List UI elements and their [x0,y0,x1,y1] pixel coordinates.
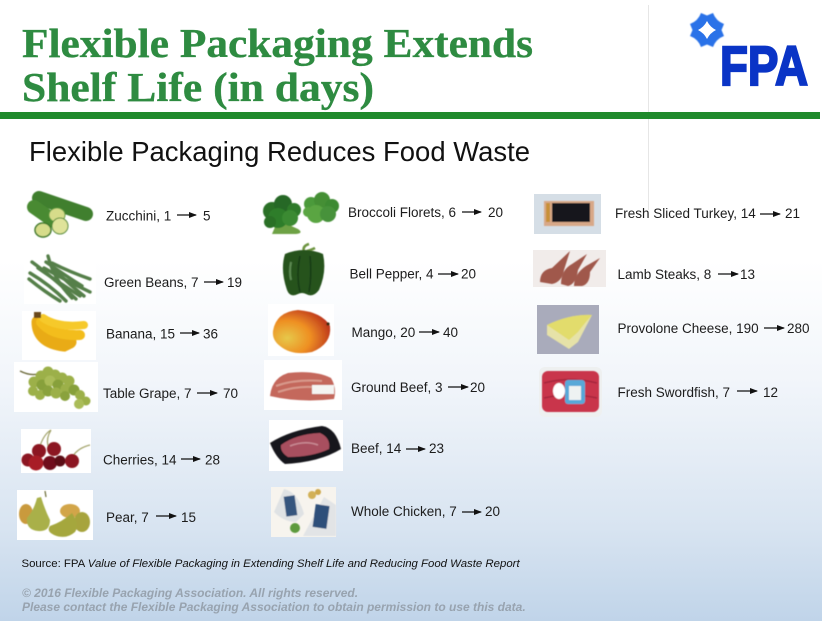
item: fresh swordfish: Fresh Swordfish, 7 [618,385,730,400]
item: green beans: Green Beans, 7 [104,275,199,290]
item: beef: 23 [429,441,444,456]
item: bell pepper: 20 [461,266,476,282]
title: Flexible Packaging Extends [22,20,533,66]
item: fresh sliced turkey [534,194,800,234]
item: mango: Mango, 20 [352,325,415,340]
logo: FPA [690,13,808,97]
item: bell pepper [283,244,476,295]
copyright notice: © 2016 Flexible Packaging Association. All rights reserved. [22,586,358,600]
item: whole chicken [271,487,500,537]
item: broccoli florets [263,192,503,234]
item: whole chicken: Whole Chicken, 7 [351,504,457,519]
green divider bar [0,112,820,119]
item: ground beef [264,360,485,410]
title: Shelf Life (in days) [22,64,374,110]
item: lamb steaks [533,250,755,287]
item: banana: 36 [203,326,218,342]
copyright notice: Please contact the Flexible Packaging Association to obtain permission to use this data. [22,600,526,614]
item: mango [268,304,458,356]
copyright notice [22,586,526,614]
item: table grape [14,362,238,412]
item: fresh sliced turkey: 21 [785,206,800,221]
item: broccoli florets: 20 [488,205,503,220]
item: table grape: Table Grape, 7 [103,386,192,401]
item: provolone cheese: 280 [787,321,810,336]
column 1: produce [14,190,242,540]
item: fresh sliced turkey: Fresh Sliced Turkey, 14 [615,206,756,221]
item: zucchini [22,190,211,243]
item: cherries: Cherries, 14 [103,452,177,468]
item: pear: Pear, 7 [106,510,149,525]
item: bell pepper: Bell Pepper, 4 [350,266,434,282]
item: pear [17,490,196,540]
item: pear: 15 [181,510,196,525]
item: banana: Banana, 15 [106,326,175,342]
item: zucchini: Zucchini, 1 [106,208,171,224]
column 3: meat, cheese and fish [533,194,810,417]
item: green beans [24,252,242,304]
item: cherries [21,429,220,473]
item: ground beef: 20 [470,380,485,395]
item: lamb steaks: 13 [740,267,755,282]
item: banana [22,311,218,360]
title [22,20,533,110]
item: whole chicken: 20 [485,504,500,519]
item: fresh swordfish: 12 [763,385,778,400]
column 2: produce and meat [263,192,503,537]
item: provolone cheese: Provolone Cheese, 190 [618,321,759,336]
item: broccoli florets: Broccoli Florets, 6 [348,205,456,220]
item: beef: Beef, 14 [351,441,402,456]
item: provolone cheese [537,305,810,354]
item: cherries: 28 [205,452,220,468]
item: table grape: 70 [223,386,238,401]
subtitle: Flexible Packaging Reduces Food Waste [29,136,530,167]
source note: Source: FPA Value of Flexible Packaging in Extending Shelf Life and Reducing Food Waste Report [22,558,520,570]
item: green beans: 19 [227,275,242,290]
item: zucchini: 5 [203,208,211,224]
item: fresh swordfish [539,367,778,417]
item: beef [269,420,444,471]
item: mango: 40 [443,325,458,340]
item: lamb steaks: Lamb Steaks, 8 [618,267,711,282]
item: ground beef: Ground Beef, 3 [351,380,443,395]
